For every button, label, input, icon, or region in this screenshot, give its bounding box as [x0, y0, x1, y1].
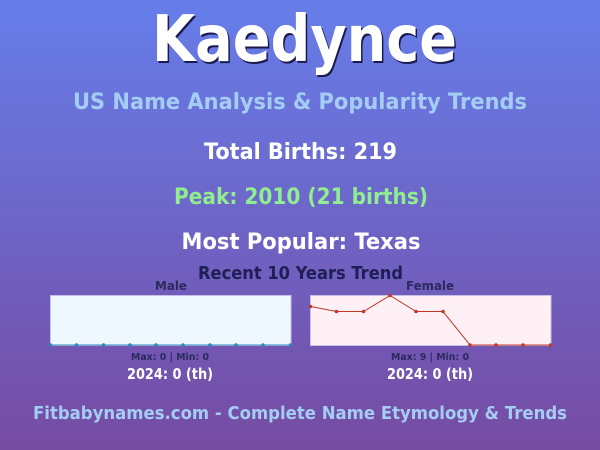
female 2024 value: 2024: 0 (th) [387, 365, 473, 383]
female label: Female [406, 279, 454, 293]
male plot area [50, 296, 291, 346]
total births: Total Births: 219 [204, 140, 397, 165]
title: Kaedynce [154, 5, 458, 79]
female max min: Max: 9 | Min: 0 [391, 352, 469, 363]
subtitle: US Name Analysis & Popularity Trends [73, 90, 527, 115]
most popular: Most Popular: Texas [182, 230, 420, 255]
panel: male chart [49, 279, 292, 383]
female plot area [310, 296, 551, 346]
title: Kaedynce [152, 3, 457, 77]
peak: Peak: 2010 (21 births) [174, 185, 428, 210]
footer: Fitbabynames.com - Complete Name Etymology & Trends [33, 403, 567, 424]
trend heading: Recent 10 Years Trend [198, 263, 403, 284]
panel: female chart [309, 279, 552, 383]
male label: Male [155, 279, 187, 293]
male max min: Max: 0 | Min: 0 [131, 352, 209, 363]
male 2024 value: 2024: 0 (th) [127, 365, 213, 383]
female line [309, 294, 552, 347]
male line [49, 343, 292, 347]
